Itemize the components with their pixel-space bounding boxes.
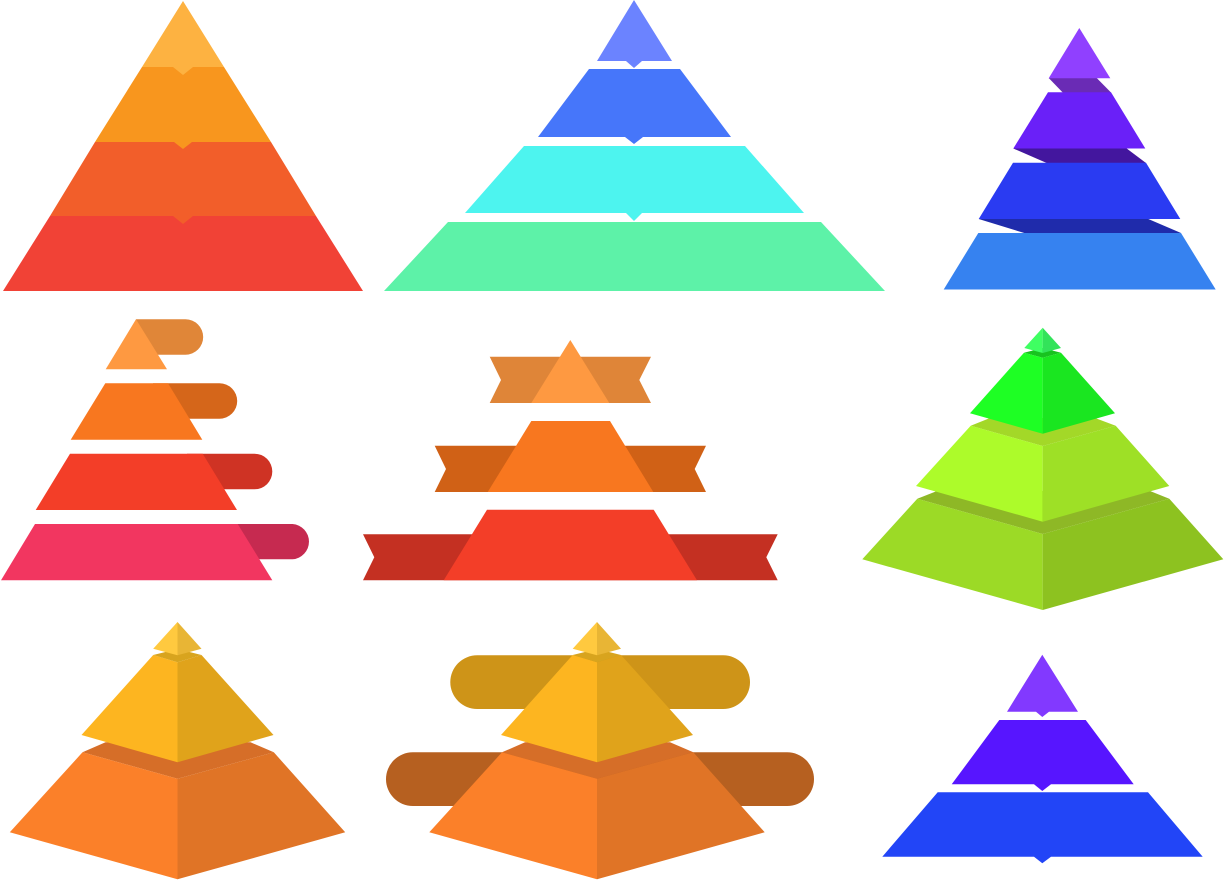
middle left face (82, 655, 178, 762)
middle ledge (971, 418, 1116, 446)
ribbon 3 (363, 534, 778, 580)
middle right face (1043, 426, 1169, 522)
upper left face (970, 353, 1043, 434)
cap left face (153, 622, 178, 655)
pyramid 3: purple-blue tiers with shadows (944, 28, 1216, 290)
cap right face (178, 622, 202, 655)
lower left face (10, 752, 177, 879)
pyramid 8: orange 3D pyramid with pills (386, 622, 814, 879)
base ledge (917, 491, 1169, 534)
tier 3 red (36, 454, 237, 510)
lower ledge (502, 742, 693, 779)
tier 3 cyan (465, 146, 804, 221)
tier 1 violet (1007, 655, 1078, 717)
tier 2 blue (538, 69, 731, 144)
ribbon 2 (435, 446, 706, 492)
tier 1 amber (142, 1, 224, 75)
tier 1 periwinkle (597, 0, 672, 68)
pyramid 1: warm flat pyramid with notches (3, 1, 363, 291)
tier 3 indigo (979, 163, 1180, 219)
middle left face (916, 426, 1043, 522)
cap left face (573, 622, 597, 655)
tier 2 orange (488, 421, 653, 492)
lower pill (386, 752, 814, 806)
pyramid 5: tiers with ribbons (363, 340, 778, 580)
ribbon 1 (490, 357, 651, 403)
tier 1 light orange (106, 319, 167, 369)
tier 4 pink (1, 524, 272, 580)
tier 2 orange (95, 67, 271, 149)
pyramid 6: green 3D pyramid (862, 328, 1223, 610)
lower left face (429, 752, 597, 879)
tier 4 blue (944, 233, 1216, 290)
tab 3 (187, 454, 272, 489)
shadow under tier 1 (1049, 78, 1111, 92)
tier 4 mint (384, 222, 885, 291)
middle right face (178, 655, 274, 762)
cap left face (1024, 328, 1043, 353)
tier 1 light orange (531, 340, 609, 403)
pyramid 4: tiers with right-side tabs (1, 319, 309, 580)
middle left face (501, 655, 597, 762)
tier 3 red (444, 510, 697, 580)
shadow under tier 3 (979, 219, 1181, 233)
cap right face (1043, 328, 1061, 353)
lower right face (597, 752, 765, 879)
tier 2 purple (952, 720, 1134, 791)
upper pill (450, 655, 750, 709)
pyramid 9: violet-blue separated tiers (882, 655, 1203, 863)
tier 2 orange (71, 383, 202, 440)
base left face (862, 499, 1043, 610)
tab 1 (136, 319, 203, 355)
lower right face (178, 752, 345, 879)
cap right face (597, 622, 621, 655)
upper ledge (153, 649, 202, 662)
shadow under tier 2 (1013, 148, 1146, 163)
tier 4 red (3, 216, 363, 291)
lower ledge (82, 742, 274, 779)
upper ledge (1024, 348, 1061, 358)
tab 4 (222, 524, 309, 559)
tier 1 violet (1049, 28, 1110, 78)
tab 2 (153, 383, 237, 419)
base right face (1043, 499, 1223, 610)
upper ledge (573, 649, 621, 662)
tier 2 purple (1013, 92, 1145, 148)
pyramid 7: orange 3D pyramid (10, 622, 345, 879)
tier 3 orange-red (50, 142, 316, 224)
upper right face (1043, 353, 1115, 434)
pyramid 2: separated cool tiers (384, 0, 885, 291)
tier 3 blue (882, 792, 1203, 863)
middle right face (597, 655, 693, 762)
